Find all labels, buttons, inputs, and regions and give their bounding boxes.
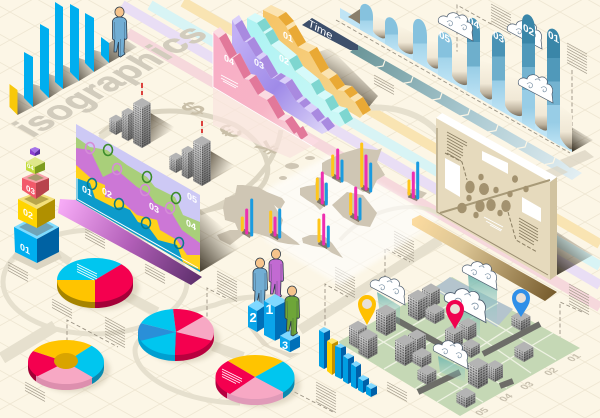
beige panel shadow bbox=[557, 232, 593, 275]
stairs 04 pink bbox=[213, 27, 319, 146]
cube 03: 03 bbox=[26, 183, 35, 197]
city buildings bbox=[349, 283, 534, 408]
podium box 1: 1 bbox=[266, 301, 274, 317]
podium box 2: 2 bbox=[250, 310, 257, 325]
bar 3 bbox=[335, 343, 346, 379]
cloud behind bars bbox=[507, 21, 542, 49]
cube 02: 02 bbox=[23, 207, 34, 223]
bar 6 bbox=[358, 375, 369, 393]
world map with bar triples bbox=[217, 144, 440, 285]
panel text lines bbox=[447, 132, 467, 161]
bar 2 bbox=[327, 338, 338, 375]
location pins bbox=[358, 289, 530, 329]
stairs 02 cyan bbox=[247, 13, 353, 127]
person: top left bbox=[112, 7, 127, 57]
area chart panel: 02 bbox=[102, 186, 113, 202]
bar base shadows bbox=[243, 176, 418, 247]
timeline arrow band: Time bbox=[308, 16, 333, 43]
area chart panel: 04 bbox=[186, 218, 197, 234]
area chart base band bbox=[58, 199, 202, 285]
pie chart B: donut bbox=[28, 340, 112, 394]
stairs 02 cyan: 02 bbox=[279, 53, 290, 69]
staircase chart bbox=[213, 5, 378, 158]
city axis labels: 04 bbox=[497, 392, 517, 404]
area chart panel: 05 bbox=[187, 191, 198, 207]
wave bar chart: 03 bbox=[493, 29, 504, 46]
bar 4 bbox=[343, 353, 354, 384]
chart shadow bbox=[200, 209, 245, 272]
city roads bbox=[395, 319, 540, 392]
currency symbols bbox=[174, 97, 288, 160]
cube 01: 01 bbox=[20, 242, 31, 258]
bar 7 bbox=[366, 383, 377, 397]
stairs 03 purple: 03 bbox=[254, 57, 265, 73]
person: green third place bbox=[285, 286, 300, 336]
isometric city map bbox=[338, 262, 585, 418]
area chart panel: 03 bbox=[149, 201, 160, 217]
bar triples bbox=[242, 144, 418, 246]
pie chart C bbox=[138, 309, 222, 364]
wave bar chart: 01 bbox=[548, 29, 559, 46]
bar 1 bbox=[319, 327, 330, 369]
stairs 03 purple bbox=[232, 15, 335, 134]
currency symbols: $ bbox=[174, 97, 213, 120]
podium box 3: 3 bbox=[282, 340, 288, 352]
3D descending bar chart bbox=[319, 327, 377, 397]
stacked cubes bbox=[12, 147, 62, 270]
wave bar chart: 05 bbox=[439, 29, 450, 46]
wave bar chart: 02 bbox=[523, 22, 534, 39]
white boxes bbox=[445, 151, 541, 222]
currency symbols: ¥ bbox=[249, 137, 288, 160]
cloud light columns bbox=[377, 274, 497, 382]
clouds on wave chart bbox=[438, 13, 473, 41]
stairs 04 pink: 04 bbox=[224, 53, 235, 69]
podium with three people bbox=[248, 249, 300, 358]
city axis labels: 03 bbox=[518, 380, 538, 392]
currency symbols: € bbox=[211, 120, 250, 143]
beige base band bbox=[412, 215, 557, 301]
area chart panel: 01 bbox=[82, 184, 93, 200]
cube 05 bbox=[30, 147, 40, 156]
timeline arrow band bbox=[302, 16, 594, 180]
wave bar panel shadow bbox=[560, 120, 593, 152]
wave bars bbox=[360, 4, 373, 37]
city axis labels bbox=[473, 352, 585, 418]
wave bar chart bbox=[340, 4, 572, 152]
wave bar chart: 04 bbox=[468, 15, 479, 32]
gaps with shadow bbox=[348, 9, 572, 150]
city ground bbox=[338, 277, 580, 416]
bar 5 bbox=[351, 361, 361, 389]
bar chart: blue bars bbox=[10, 2, 137, 115]
pie chart A bbox=[57, 258, 140, 312]
stairs 01 orange: 01 bbox=[283, 30, 294, 46]
colored ground strips bbox=[122, 2, 600, 307]
buildings: skyscraper groups bbox=[110, 82, 236, 186]
continents bbox=[217, 148, 427, 258]
city axis labels: 01 bbox=[565, 352, 585, 364]
person: purple first place bbox=[269, 249, 284, 299]
area chart panel bbox=[76, 124, 200, 272]
beige scatter panel bbox=[436, 113, 557, 280]
city axis labels: 02 bbox=[542, 366, 562, 378]
title: isographics: isographics bbox=[3, 19, 217, 142]
scatter bubbles bbox=[457, 174, 529, 218]
pie chart D bbox=[216, 355, 302, 408]
clouds over city bbox=[370, 277, 405, 305]
person: blue second place bbox=[253, 258, 268, 308]
stairs 01 orange bbox=[263, 5, 371, 118]
cube 04: 04 bbox=[27, 162, 34, 173]
ground rings and roads bbox=[2, 107, 440, 403]
city axis labels: 05 bbox=[473, 406, 493, 418]
